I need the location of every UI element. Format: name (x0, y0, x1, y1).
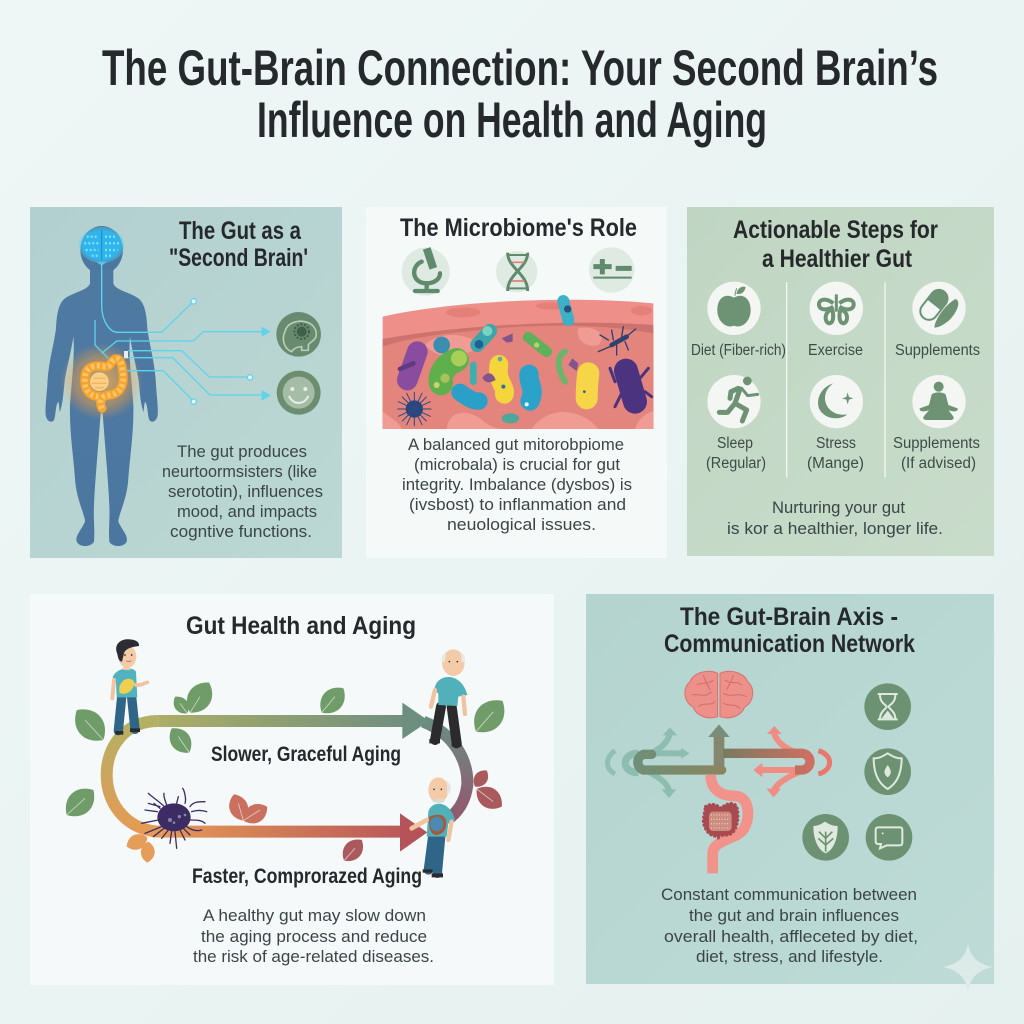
central arrows (638, 724, 810, 770)
description text: A healthy gut may slow down (203, 906, 426, 925)
panel: the microbiome's role (366, 207, 667, 558)
icon: meditation (912, 375, 966, 428)
step labels: Sleep (717, 435, 753, 452)
heading: a Healthier Gut (762, 245, 913, 273)
icon: brain (685, 671, 753, 718)
panel: gut-brain axis (586, 594, 994, 991)
heading: Communication Network (664, 630, 915, 658)
description text: A balanced gut mitorobpiome (408, 435, 624, 454)
step labels: Supplements (895, 342, 980, 359)
heading: Gut Health and Aging (186, 612, 416, 640)
icon: moon and star (810, 375, 863, 428)
closing text (727, 498, 943, 538)
microbe (142, 788, 207, 848)
panel: the gut as a second brain (30, 207, 342, 558)
leaves (58, 676, 513, 867)
gut glow (60, 343, 143, 420)
communication network diagram (607, 671, 912, 873)
description text: neurtoormsisters (like (162, 462, 317, 481)
heading (733, 216, 938, 273)
description text: serototin), influences (168, 482, 323, 501)
description text (661, 885, 918, 966)
description text: integrity. Imbalance (dysbos) is (402, 475, 632, 494)
figure: older healthy person (429, 649, 467, 747)
icon: leaf shield (802, 814, 849, 861)
description text: cogntive functions. (170, 522, 312, 541)
heading: "Second Brain' (169, 244, 308, 272)
figure: young person (112, 639, 147, 735)
icon: glowing brain (79, 227, 124, 266)
sparkle mark (943, 944, 993, 991)
figure: older unhealthy person (412, 777, 455, 877)
step labels: (If advised) (901, 455, 976, 472)
icon: smiley (277, 371, 321, 415)
icon: apple (707, 282, 761, 335)
description text (162, 442, 323, 541)
human figure illustration (46, 226, 321, 546)
icon: DNA helix (496, 251, 537, 292)
title: Influence on Health and Aging (257, 92, 767, 148)
pale arrows right (753, 726, 830, 797)
icon: shield with drop (864, 748, 911, 795)
title (102, 40, 938, 148)
panel: gut health and aging (30, 594, 554, 985)
icon: speech bubble (866, 814, 912, 861)
heading (169, 217, 308, 272)
closing text: is kor a healthier, longer life. (727, 519, 943, 538)
description text (402, 435, 632, 534)
icon: colon (703, 804, 738, 839)
step labels: Exercise (808, 342, 863, 359)
heading (664, 603, 915, 658)
step icons (707, 282, 966, 478)
icon: brain with gear (276, 312, 321, 357)
step labels: (Regular) (706, 455, 766, 472)
closing text: Nurturing your gut (772, 498, 905, 517)
description text: the gut and brain influences (689, 906, 899, 925)
description text: (microbala) is crucial for gut (414, 455, 620, 474)
description text: (ivsbost) to inflanmation and (409, 495, 626, 514)
description text: overall health, affleceted by diet, (664, 927, 918, 946)
icon: hourglass (864, 683, 911, 730)
heading: The Gut-Brain Axis - (680, 603, 898, 631)
gut lining cross-section (383, 300, 653, 429)
step labels: Diet (Fiber-rich) (691, 342, 786, 359)
microbiome illustration (383, 247, 653, 429)
step labels: Supplements (893, 435, 980, 452)
icon: butterfly (810, 282, 863, 335)
description text: The gut produces (177, 442, 307, 461)
icon: plus and minus (589, 247, 634, 293)
intestine tube (711, 775, 748, 873)
description text: the risk of age-related diseases. (193, 947, 434, 966)
outcome labels: Slower, Graceful Aging (211, 742, 401, 766)
description text (193, 906, 434, 966)
bacteria (398, 301, 652, 426)
icon: capsule and carrot (912, 282, 966, 335)
description text: mood, and impacts (177, 502, 317, 521)
outcome labels: Faster, Comprorazed Aging (192, 864, 422, 888)
heading: The Gut as a (179, 217, 302, 245)
description text: Constant communication between (661, 885, 917, 904)
description text: the aging process and reduce (201, 927, 427, 946)
outcome labels (192, 742, 422, 888)
description text: neuological issues. (447, 515, 596, 534)
step labels (691, 342, 980, 472)
icon: runner (707, 375, 761, 428)
step labels: (Mange) (807, 455, 864, 472)
icon: microscope (402, 248, 450, 296)
panel: actionable steps (687, 207, 994, 556)
step labels: Stress (816, 435, 856, 452)
heading: The Microbiome's Role (400, 214, 637, 242)
nerve connection lines (95, 263, 271, 404)
heading: Actionable Steps for (733, 216, 938, 244)
pathway track (107, 703, 467, 852)
pale arrows left (607, 727, 690, 798)
aging pathway diagram (58, 639, 513, 877)
description text: diet, stress, and lifestyle. (696, 947, 883, 966)
